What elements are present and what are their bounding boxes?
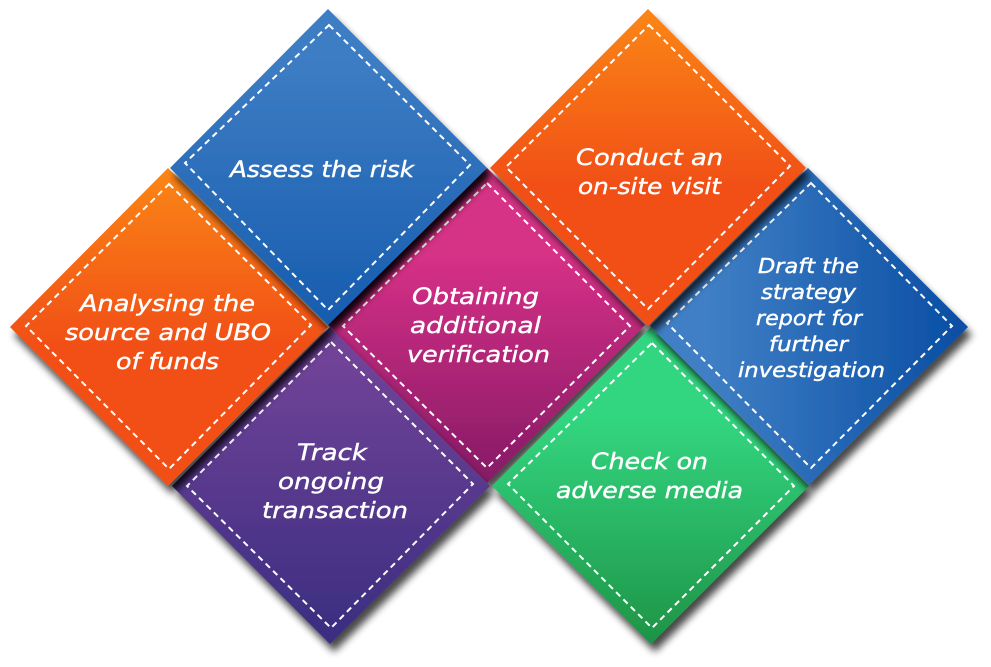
label: Draft the strategy report for further investigation: report for <box>756 306 864 330</box>
diamond: Obtaining additional verification <box>328 168 645 483</box>
label: Conduct an on-site visit: Conduct an <box>576 145 723 171</box>
label: Analysing the source and UBO of funds <box>65 291 271 375</box>
label: Draft the strategy report for further investigation <box>738 254 885 382</box>
diamond: Draft the strategy report for further investigation <box>650 168 968 485</box>
label: Draft the strategy report for further investigation: investigation <box>738 358 885 382</box>
label: Analysing the source and UBO of funds: source and UBO <box>65 320 271 346</box>
label: Conduct an on-site visit: on-site visit <box>578 174 722 200</box>
diamond: Assess the risk <box>170 9 487 325</box>
diamond: Conduct an on-site visit <box>490 9 806 326</box>
label: Track ongoing transaction: ongoing <box>278 469 384 495</box>
label: Draft the strategy report for further investigation: strategy <box>761 280 857 304</box>
label: Analysing the source and UBO of funds: Analysing the <box>78 291 255 317</box>
label: Draft the strategy report for further investigation: Draft the <box>758 254 859 278</box>
label: Track ongoing transaction: Track <box>297 440 368 466</box>
label: Track ongoing transaction: transaction <box>262 498 408 524</box>
label: Track ongoing transaction <box>262 440 408 524</box>
label: Analysing the source and UBO of funds: of funds <box>116 349 219 375</box>
label: Check on adverse media: Check on <box>591 449 708 475</box>
diamond: Check on adverse media <box>492 327 809 644</box>
label: Check on adverse media: adverse media <box>556 478 743 504</box>
label: Obtaining additional verification: verification <box>407 342 550 368</box>
label: Draft the strategy report for further investigation: further <box>769 332 850 356</box>
label: Obtaining additional verification: Obtaining <box>412 284 539 310</box>
label: Check on adverse media <box>556 449 743 504</box>
label: Obtaining additional verification: additional <box>410 313 542 339</box>
label: Obtaining additional verification <box>407 284 550 368</box>
diamond: Track ongoing transaction <box>172 327 490 644</box>
label: Conduct an on-site visit <box>576 145 723 200</box>
diamond: Analysing the source and UBO of funds <box>10 168 328 486</box>
label: Assess the risk: Assess the risk <box>228 157 415 183</box>
